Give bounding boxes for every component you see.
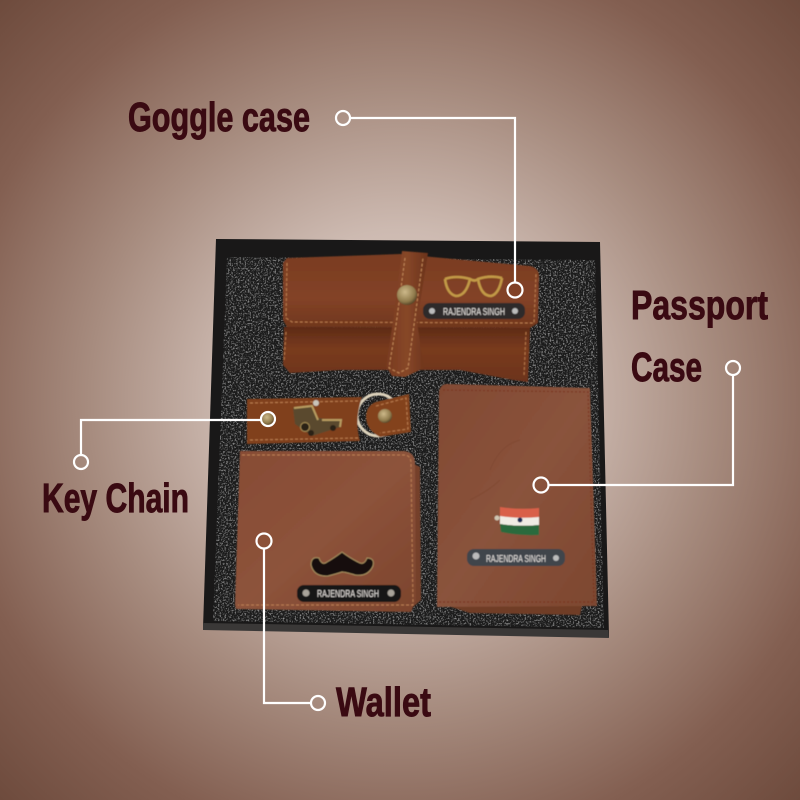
connector: key chain	[74, 412, 275, 469]
label: goggle case: Goggle case	[128, 94, 310, 140]
moustache charm	[311, 552, 373, 576]
foam tray	[213, 257, 604, 628]
wallet name plate	[297, 585, 401, 602]
case stud	[397, 285, 417, 305]
passport name plate	[467, 549, 565, 566]
case flap	[283, 254, 539, 328]
flag charm	[494, 507, 539, 535]
case pocket	[283, 327, 530, 382]
label: key chain: Key Chain	[42, 475, 189, 521]
callout: goggle case	[128, 94, 522, 298]
label: wallet: Wallet	[336, 679, 431, 725]
passport name plate: RAJENDRA SINGH	[486, 554, 546, 565]
car charm	[293, 400, 341, 436]
callout: key chain	[42, 412, 275, 521]
label: passport case: Case	[631, 344, 702, 390]
key ring	[357, 394, 399, 436]
connector: wallet	[256, 534, 325, 710]
case name plate	[423, 303, 525, 319]
passport cover	[437, 384, 597, 607]
gift box	[203, 239, 609, 638]
fob body	[247, 397, 362, 444]
wallet	[235, 451, 421, 612]
wallet back edge	[410, 462, 421, 608]
passport case	[437, 384, 597, 615]
case strap	[386, 251, 428, 377]
wallet front	[235, 451, 416, 612]
callout: passport case	[534, 282, 768, 492]
box rim	[203, 239, 609, 637]
label: passport case	[631, 282, 768, 390]
connector: passport case	[534, 361, 740, 492]
fob loop	[366, 394, 411, 437]
passport pages edge	[445, 605, 582, 615]
key chain	[247, 394, 411, 444]
callout: wallet	[256, 534, 431, 725]
fob studs	[262, 413, 274, 425]
goggle case	[283, 251, 539, 382]
wallet name plate: RAJENDRA SINGH	[317, 589, 379, 600]
connector: goggle case	[336, 111, 522, 298]
case name plate: RAJENDRA SINGH	[443, 307, 505, 318]
glasses charm	[445, 277, 502, 296]
